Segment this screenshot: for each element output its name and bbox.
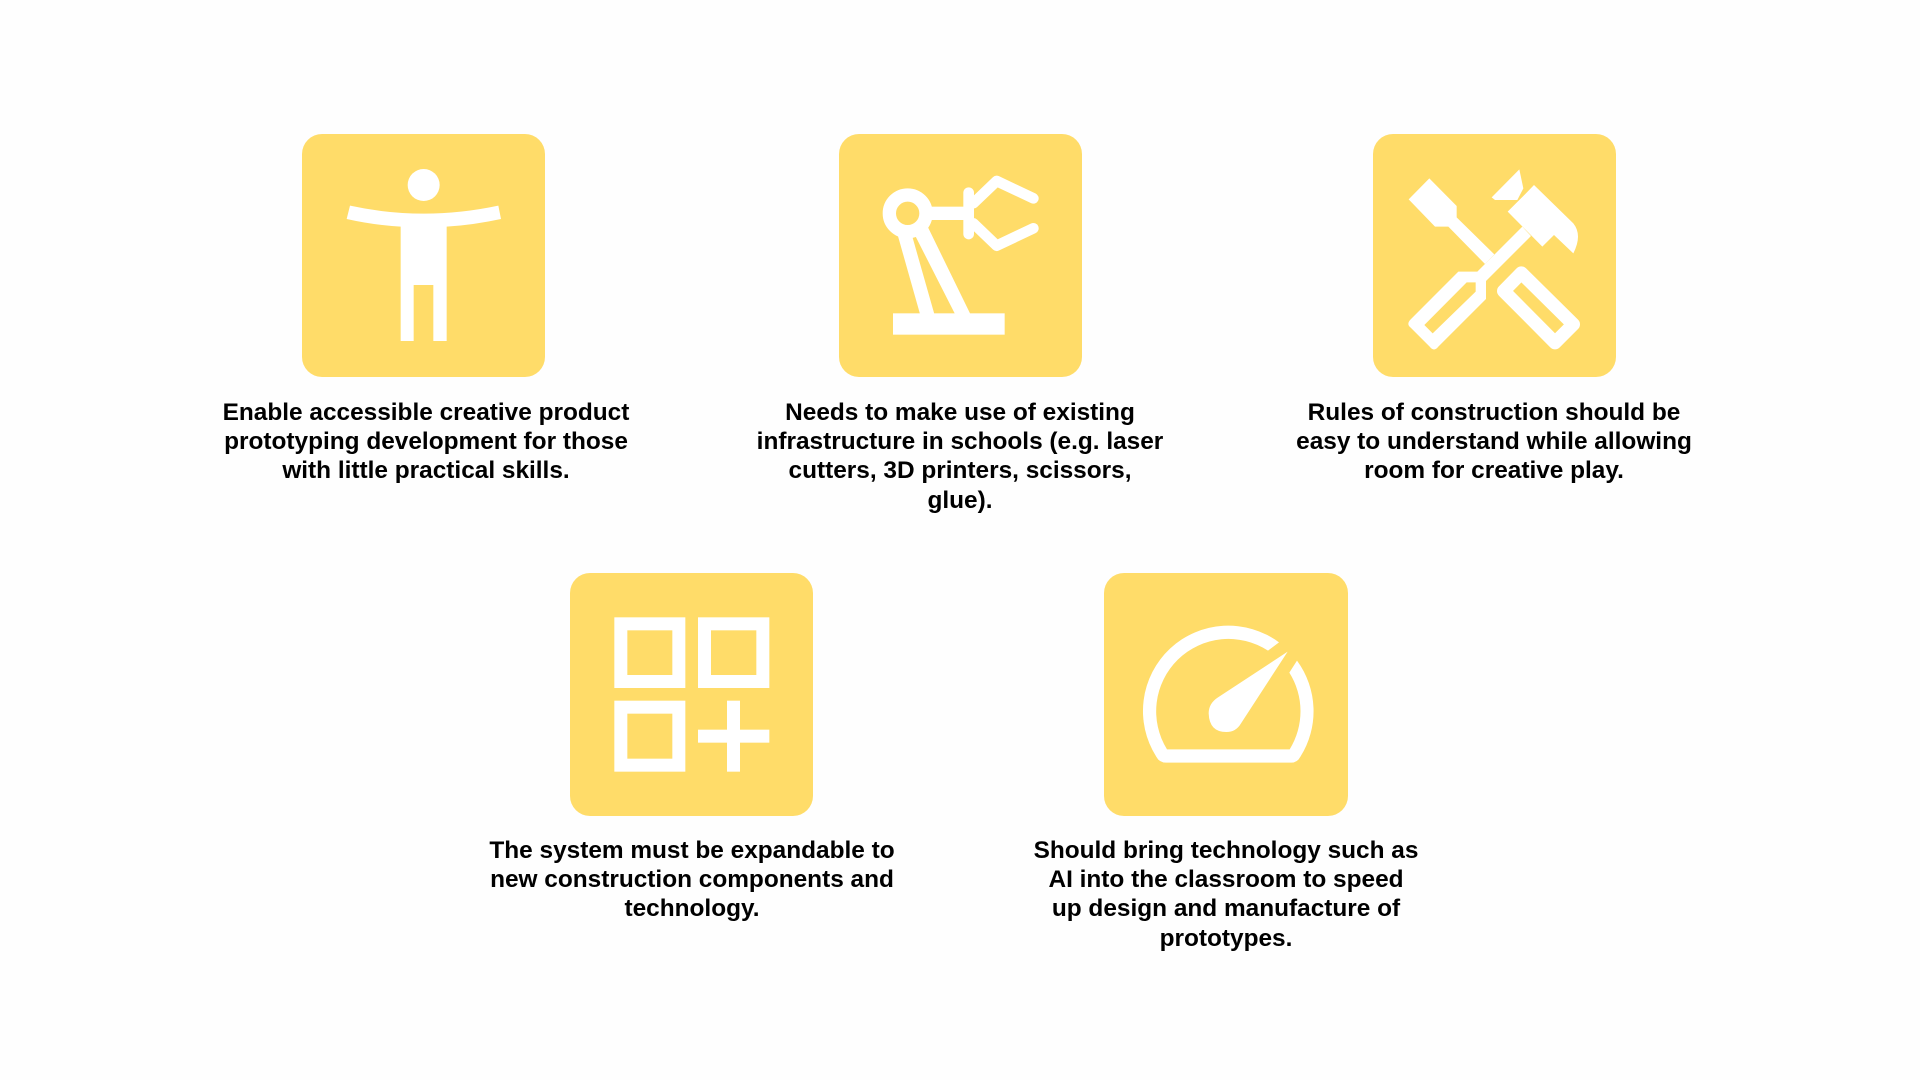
text: existing infrastructure: infrastructure in schools (e.g. laser	[757, 428, 1163, 455]
text: existing infrastructure: cutters, 3D printers, scissors,	[788, 457, 1131, 484]
icon tile: speedometer	[1104, 573, 1348, 816]
icon: speedometer	[1142, 626, 1314, 763]
icon tile: person with open arms	[302, 134, 545, 377]
text: AI in the classroom: Should bring technology such as	[1034, 837, 1418, 864]
text: AI in the classroom: prototypes.	[1160, 925, 1292, 952]
text: expandable system: new construction components and	[490, 866, 894, 893]
icon: robot arm	[882, 176, 1039, 335]
text: existing infrastructure: glue).	[927, 487, 993, 514]
icon tile: crossed tools	[1373, 134, 1616, 377]
text: expandable system: technology.	[624, 895, 760, 922]
icon: modular grid with plus	[614, 617, 770, 772]
text: AI in the classroom: up design and manufacture of	[1052, 895, 1400, 922]
text: AI in the classroom	[1034, 837, 1418, 952]
icon: person with open arms	[346, 169, 501, 341]
text: rules of construction: easy to understand while allowing	[1296, 428, 1692, 455]
text: accessible prototyping	[223, 399, 630, 484]
text: accessible prototyping: with little practical skills.	[282, 457, 570, 484]
text: existing infrastructure: Needs to make use of existing	[785, 399, 1135, 426]
text: AI in the classroom: AI into the classroom to speed	[1048, 866, 1404, 893]
text: accessible prototyping: prototyping development for those	[224, 428, 628, 455]
text: rules of construction: Rules of construction should be	[1308, 399, 1680, 426]
text: existing infrastructure	[757, 399, 1163, 514]
icon tile: robot arm	[839, 134, 1082, 377]
text: expandable system: The system must be expandable to	[489, 837, 895, 864]
icon tile: modular grid	[570, 573, 813, 816]
text: rules of construction	[1296, 399, 1692, 484]
icon: crossed tools	[1408, 170, 1580, 350]
text: accessible prototyping: Enable accessible creative product	[223, 399, 629, 426]
text: expandable system	[489, 837, 895, 922]
text: rules of construction: room for creative play.	[1364, 457, 1624, 484]
